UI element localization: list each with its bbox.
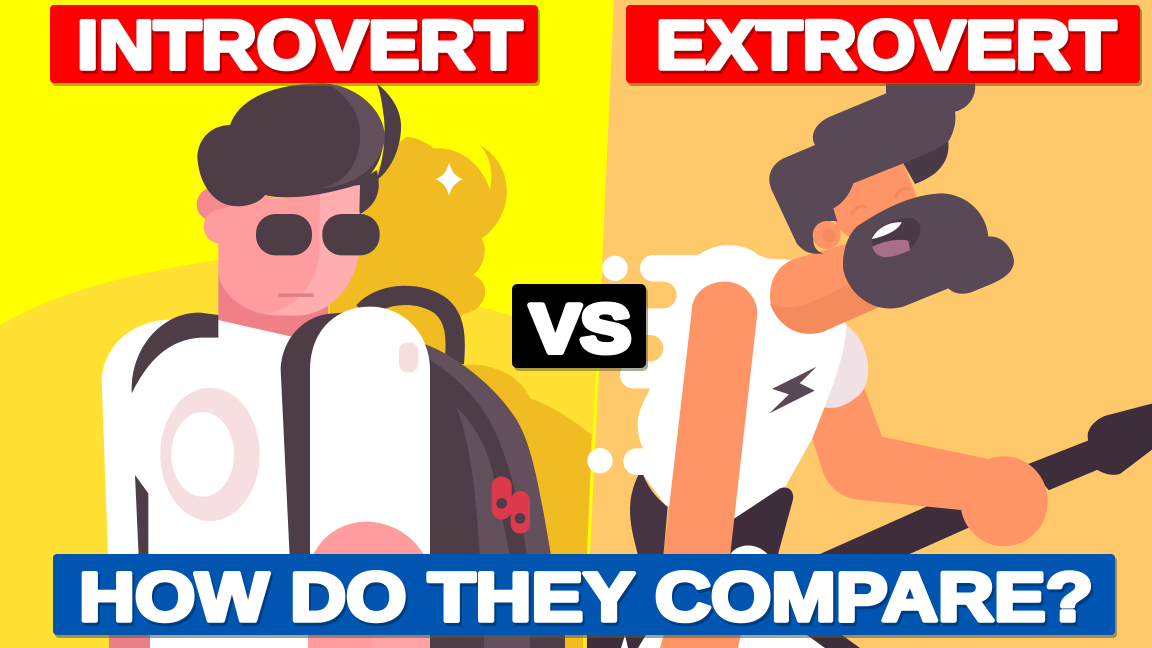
guitar body: [730, 488, 793, 560]
ear: [813, 221, 841, 249]
panel: introvert character: [102, 83, 592, 563]
heading: extrovert label: EXTROVERT: [656, 6, 1116, 84]
face: [833, 163, 917, 247]
white arm: [310, 307, 430, 563]
red badges: [492, 477, 530, 534]
shoulder strap: [132, 313, 218, 393]
guitar neck and headstock: [816, 404, 1152, 556]
badge: versus: VS: [530, 291, 631, 367]
heading: introvert label: INTROVERT: [77, 6, 522, 84]
guitar pickup: [730, 546, 768, 555]
beard: [843, 193, 1014, 308]
bare arm: [812, 383, 988, 512]
sleeve: [823, 322, 868, 408]
pants: [630, 475, 668, 557]
panel: extrovert body: [698, 254, 1152, 560]
center strap: [281, 310, 367, 563]
icon: lightning bolt: [769, 367, 817, 414]
shirt: [102, 317, 292, 563]
sunglasses: [256, 214, 380, 255]
hair curl: [377, 83, 401, 180]
icon: sparkle: [436, 163, 463, 196]
sleeve patch: [399, 342, 418, 373]
backpack base: [420, 340, 552, 560]
mouth: [872, 218, 920, 257]
hand: [960, 456, 1048, 546]
hand: [307, 522, 430, 563]
panel: extrovert head: [769, 83, 1014, 334]
backpack inner fold: [456, 407, 511, 560]
under hair: [903, 142, 949, 184]
face highlight: [263, 185, 360, 316]
hair highlight: [320, 85, 385, 188]
introvert ground: [0, 260, 597, 648]
hair: [769, 83, 975, 254]
shirt: [698, 254, 846, 522]
mouth: [278, 293, 314, 297]
hair: [197, 83, 383, 206]
heading: how do they compare: HOW DO THEY COMPARE?: [79, 558, 1093, 636]
shirt splash: [620, 245, 772, 517]
neck: [218, 270, 328, 342]
introvert arm and strap: [281, 307, 430, 563]
face: [218, 185, 360, 316]
panel: introvert background: [0, 0, 614, 648]
back hair: [353, 170, 379, 214]
neck shadow: [770, 285, 880, 334]
backpack handle: [363, 295, 455, 363]
paint dots: [587, 256, 628, 473]
front arm: [663, 282, 757, 557]
strip below the bottom banner: [109, 630, 860, 648]
backpack: [420, 340, 552, 560]
badge: versus: [512, 284, 646, 368]
backpack outer band: [427, 345, 552, 560]
side strap: [135, 475, 148, 563]
ear: [197, 187, 254, 244]
eyes: [852, 189, 909, 214]
gold shadow figure: [330, 137, 592, 563]
chest logo: [160, 388, 260, 521]
extrovert shirt splashes and front arm: [587, 245, 772, 557]
neck: [770, 240, 887, 334]
